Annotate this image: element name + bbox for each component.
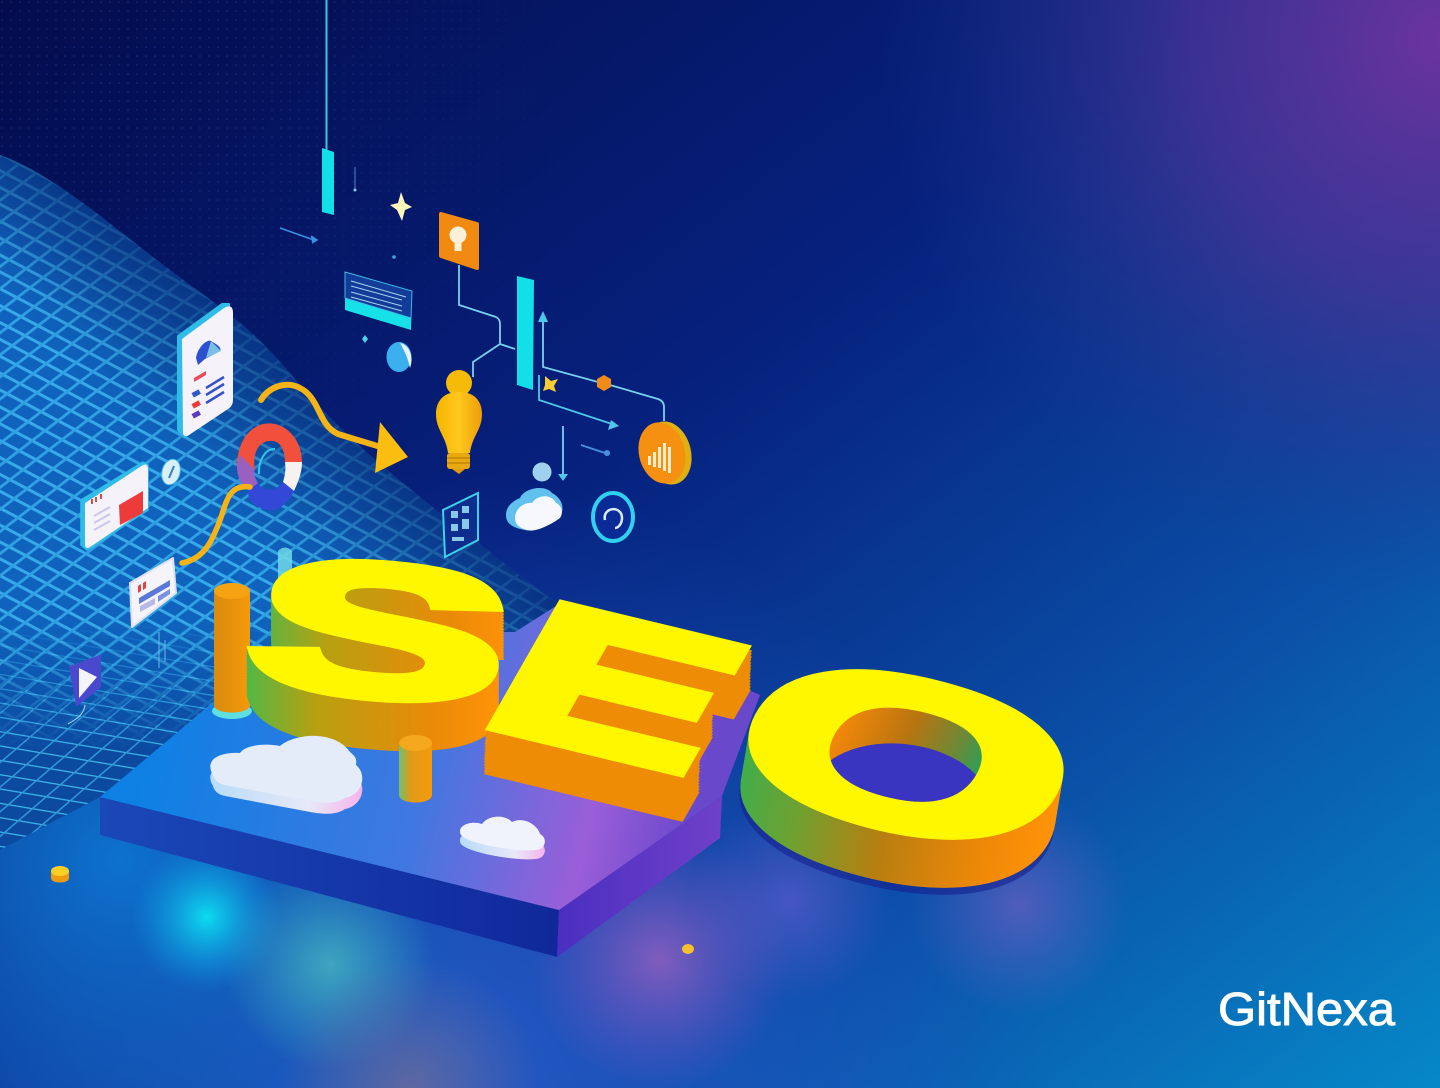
letter O: O	[689, 617, 1119, 916]
letter S: S	[233, 555, 528, 785]
yellow sparkle	[543, 376, 558, 392]
letter O: O	[683, 653, 1113, 952]
letter S: S	[233, 534, 528, 764]
letter O: O	[684, 647, 1114, 946]
connector lines	[459, 265, 664, 474]
orange node	[597, 375, 611, 391]
letter S: S	[233, 519, 528, 749]
letter O: O	[685, 641, 1115, 940]
letter S: S	[233, 564, 528, 794]
donut ring	[237, 423, 302, 510]
letter O: O	[688, 626, 1118, 925]
letter O: O	[690, 611, 1120, 910]
letter S: S	[233, 516, 528, 746]
letter O	[740, 669, 1064, 895]
floor dots	[51, 866, 694, 954]
platform right face	[557, 796, 722, 957]
letter S: S	[233, 528, 528, 758]
letter O: O	[691, 605, 1121, 904]
letter S: S	[233, 522, 528, 752]
letter E: E	[454, 590, 779, 837]
letter E: E	[454, 581, 779, 828]
arrowheads	[538, 311, 619, 481]
wave mesh surface	[0, 155, 557, 850]
floor reflections	[120, 790, 1140, 1088]
letter O: O	[689, 620, 1119, 919]
letter S: S	[233, 531, 528, 761]
letter S: S	[233, 537, 528, 767]
platform front face	[100, 797, 559, 957]
orange card with bulb	[441, 214, 477, 268]
letter E: E	[454, 599, 779, 846]
platform	[100, 606, 760, 957]
letter O: O	[686, 635, 1116, 934]
yellow wavy connector	[182, 487, 250, 563]
play icon	[68, 656, 100, 724]
text card	[345, 272, 412, 330]
top hanging cyan bar	[322, 0, 334, 215]
phone card	[178, 304, 233, 437]
light bulb	[436, 370, 482, 474]
cyan tall bar	[517, 276, 534, 390]
letter S: S	[233, 561, 528, 791]
small cloud	[460, 817, 545, 859]
letter E: E	[454, 578, 779, 825]
letter E: E	[455, 575, 780, 822]
letter S: S	[233, 540, 528, 770]
letter E: E	[455, 564, 780, 811]
letter O: O	[685, 644, 1115, 943]
large cloud	[210, 736, 362, 814]
QR card	[443, 493, 478, 557]
circular headset badge	[593, 493, 633, 541]
letter O: O	[690, 614, 1120, 913]
letter O: O	[687, 629, 1117, 928]
icon: sparkle star	[390, 192, 412, 221]
letter E: E	[454, 608, 779, 855]
thin marker line	[354, 167, 356, 192]
small sparkle	[362, 335, 368, 343]
letter E: E	[454, 593, 779, 840]
arrow: small line	[280, 228, 317, 243]
orb	[386, 342, 412, 372]
letter E: E	[454, 584, 779, 831]
letter S: S	[233, 525, 528, 755]
letter E: E	[454, 596, 779, 843]
letter O: O	[684, 650, 1114, 949]
platform top face	[100, 606, 760, 910]
letter O: O	[686, 638, 1116, 937]
letter E: E	[454, 605, 779, 852]
dot	[392, 255, 396, 259]
letter S: S	[233, 558, 528, 788]
letter E: E	[454, 602, 779, 849]
letter O: O	[691, 608, 1121, 907]
pale cyan bar	[278, 548, 292, 613]
cloud with person	[506, 462, 563, 531]
letter O: O	[688, 623, 1118, 922]
letter S: S	[233, 543, 528, 773]
brand logo: GitNexa	[1218, 983, 1395, 1035]
orange coin chart	[632, 416, 698, 490]
big orange cylinder	[212, 583, 252, 719]
yellow curved arrow	[261, 385, 408, 473]
letter S: S	[233, 552, 528, 782]
thin pointer	[159, 632, 165, 668]
browser card	[81, 462, 148, 550]
letter O: O	[682, 660, 1112, 959]
letter E: E	[454, 587, 779, 834]
small orange cylinder	[399, 735, 432, 802]
letter E: E	[455, 572, 780, 819]
small round badge	[159, 457, 183, 487]
letter S: S	[233, 549, 528, 779]
letter S: S	[233, 546, 528, 776]
small UI card	[130, 558, 176, 627]
letter O: O	[687, 632, 1117, 931]
letter E: E	[455, 569, 780, 816]
